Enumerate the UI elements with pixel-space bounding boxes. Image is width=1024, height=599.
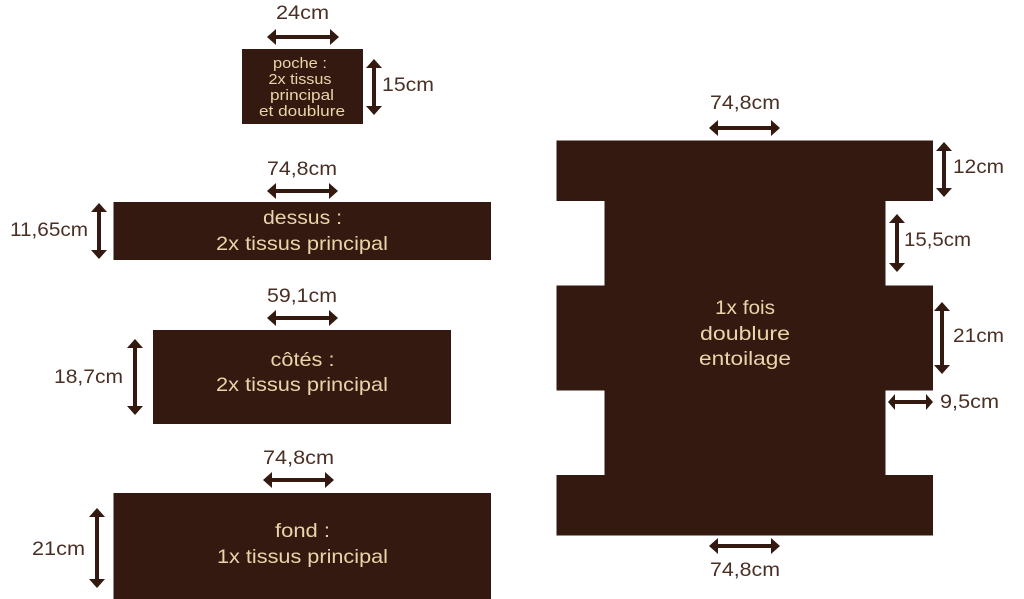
15,5cm arrow [889,214,905,272]
21cm label: 21cm [953,325,1004,347]
côtés height label: 18,7cm [54,366,123,388]
panel: fond [32,447,491,599]
poche label: poche : [273,55,327,72]
poche height label: 15cm [382,74,434,96]
bottom width label: 74,8cm [710,559,780,581]
21cm arrow [934,302,950,374]
doublure label [699,297,791,370]
doublure label: doublure [700,323,790,345]
panel: dessus [10,158,491,260]
côtés label [216,349,388,396]
fond height label: 21cm [32,538,85,560]
dessus width arrow [267,183,338,199]
panel: poche [242,2,434,124]
fond label [217,520,388,568]
dessus label: 2x tissus principal [216,233,388,255]
15,5cm label: 15,5cm [904,229,971,251]
doublure label: 1x fois [715,297,775,319]
fond label: 1x tissus principal [217,546,388,568]
9,5cm label: 9,5cm [940,391,999,413]
fond rectangle [114,493,491,599]
top width label: 74,8cm [710,92,780,114]
poche label [259,55,345,120]
fond label: fond : [275,520,330,542]
9,5cm arrow [888,394,933,410]
côtés width arrow [267,310,338,326]
12cm arrow [936,142,952,197]
dessus label: dessus : [263,207,342,229]
fond width label: 74,8cm [263,447,334,469]
côtés height arrow [127,339,143,415]
poche label: 2x tissus [268,71,332,88]
dessus label [216,207,388,255]
fond width arrow [263,472,334,488]
dessus height arrow [91,203,107,259]
panel: doublure entoilage [556,92,1004,581]
dessus height label: 11,65cm [10,219,88,241]
poche width arrow [267,29,339,45]
poche label: principal [270,87,334,104]
panel: côtés [54,285,451,424]
poche width label: 24cm [276,2,329,24]
bottom width arrow [709,538,780,554]
doublure shape [556,140,933,536]
côtés label: 2x tissus principal [216,374,388,396]
fond height arrow [89,508,105,588]
poche label: et doublure [259,103,345,120]
côtés rectangle [153,330,451,424]
côtés label: côtés : [270,349,334,371]
12cm label: 12cm [953,156,1004,178]
dessus rectangle [114,202,491,260]
poche height arrow [366,59,382,115]
doublure label: entoilage [699,348,791,370]
côtés width label: 59,1cm [267,285,337,307]
dessus width label: 74,8cm [267,158,337,180]
top width arrow [709,120,780,136]
poche rectangle [242,49,363,124]
